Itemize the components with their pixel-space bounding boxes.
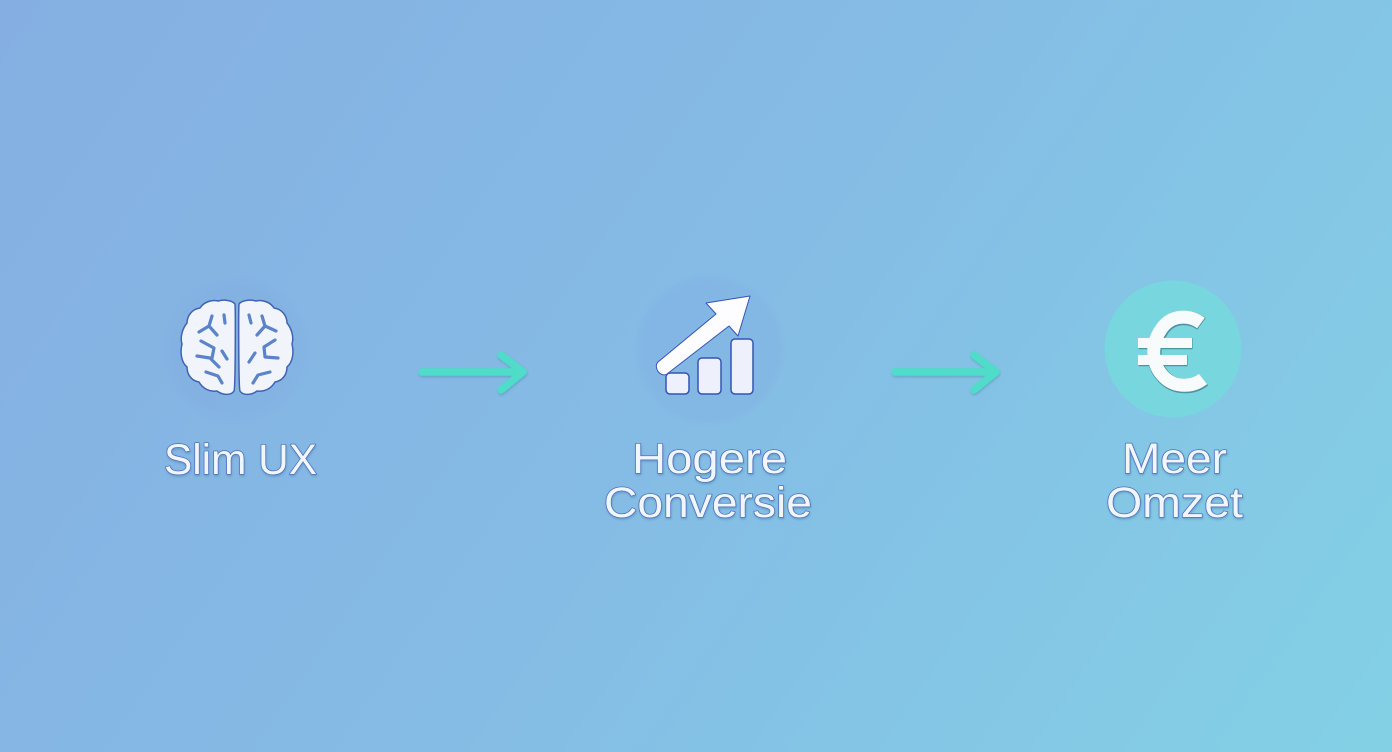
bar medium [698,358,721,394]
label: Conversie: Conversie [604,479,812,527]
label: Hogere: Hogere [632,435,787,483]
icon halo: chart [637,277,783,423]
icon circle: teal [1104,280,1242,418]
bar large [731,339,753,394]
icon halo: brain [164,278,308,422]
bar small [666,373,689,394]
icon: euro [1138,317,1204,386]
arrow 1 [422,355,523,390]
label: Slim UX: Slim UX [164,436,317,484]
step 1: Slim UX [164,278,317,484]
label: Omzet: Omzet [1106,479,1243,527]
label: Meer: Meer [1122,435,1227,483]
icon: rising bar chart [656,296,753,394]
step 2: Hogere Conversie [604,277,812,527]
icon: brain [181,300,293,394]
arrow 2 [895,355,996,390]
step 3: Meer Omzet [1104,280,1243,527]
trend arrow [656,296,750,375]
